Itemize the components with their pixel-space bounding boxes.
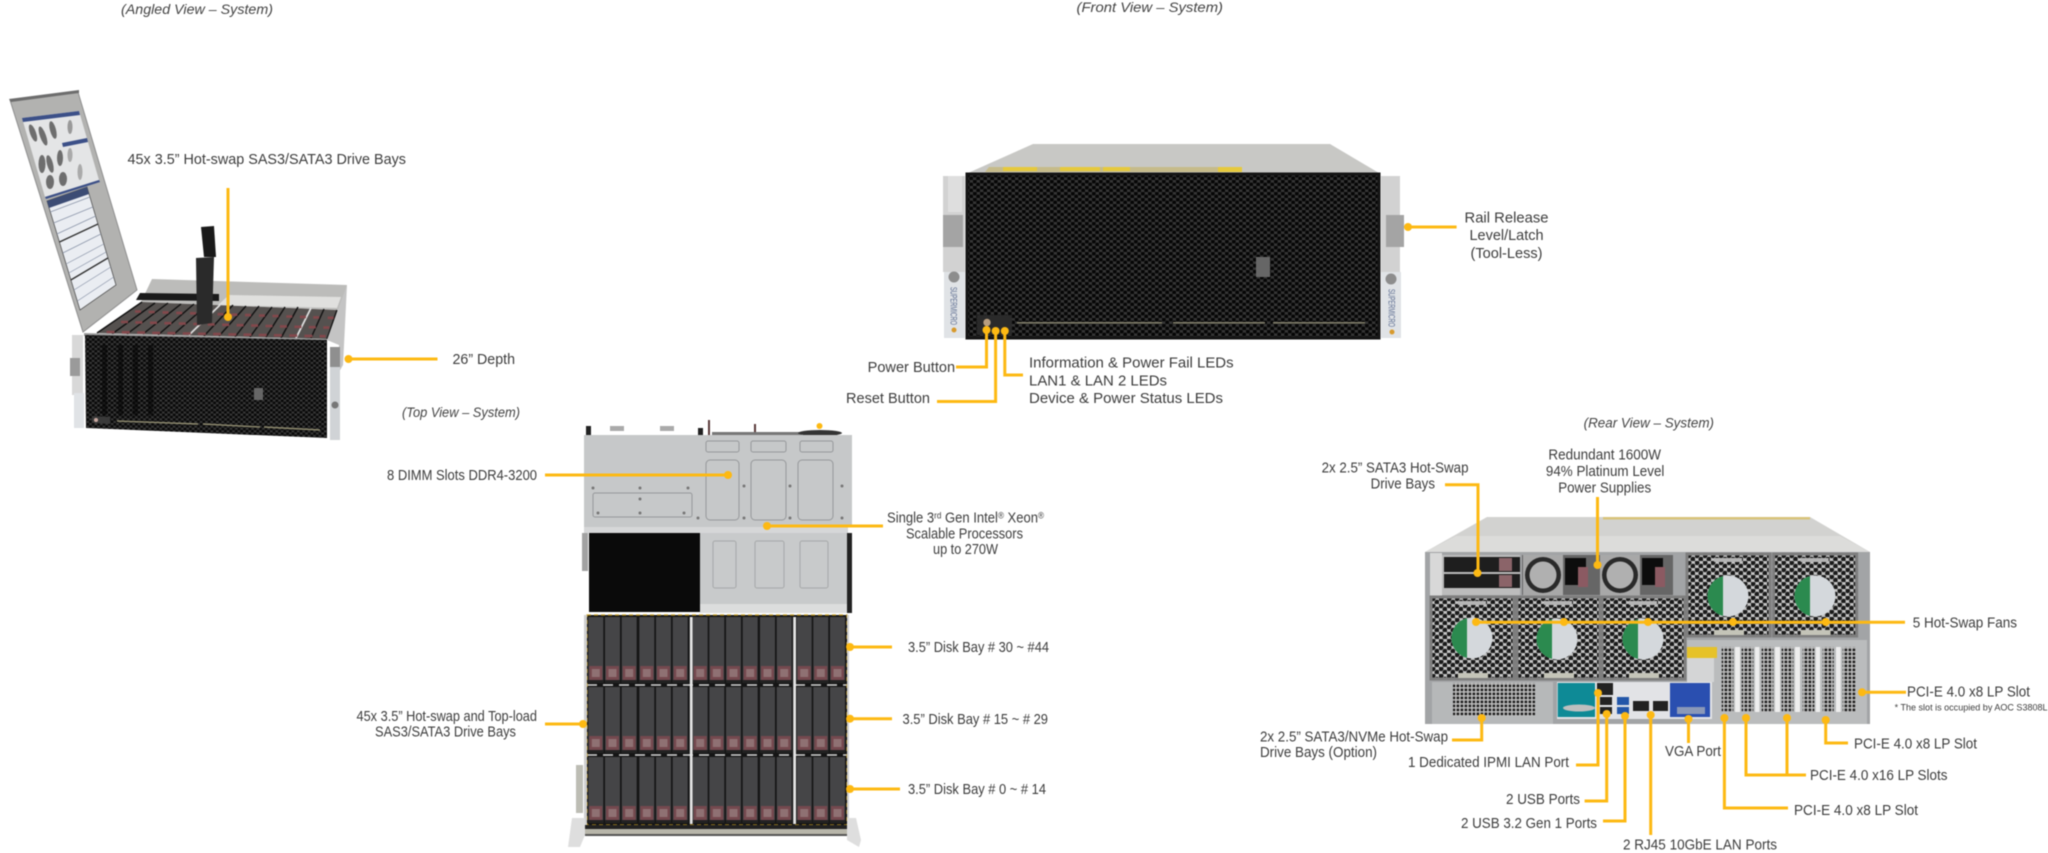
callout: processors: up to 270W [933, 542, 998, 558]
callout: processors: Single 3 [887, 510, 939, 526]
heading: top view caption: (Top View – System) [402, 405, 520, 420]
callout: LEDs: Information & Power Fail LEDs [1029, 356, 1234, 372]
callout: LEDs: Device & Power Status LEDs [1029, 391, 1223, 407]
callout: SATA3 drive bays: 2x 2.5” SATA3 Hot-Swap [1322, 461, 1468, 477]
callout: PCI-E x8 slot bottom [1720, 714, 1918, 819]
callout: VGA port [1665, 715, 1721, 760]
illustration: angled chassis with open lid [9, 90, 347, 440]
callout: RJ45 LAN ports [1623, 711, 1777, 853]
illustration: front chassis: SUPERMICRO [948, 287, 958, 325]
callout: top-load drive bays: 45x 3.5” Hot-swap and Top-load [356, 709, 537, 725]
callout: USB ports: 2 USB Ports [1506, 792, 1580, 808]
callout: DIMM slots [387, 468, 732, 484]
callout: drive bays: 45x 3.5” Hot-swap SAS3/SATA3 Drive Bays [128, 152, 406, 168]
callout: depth [344, 352, 515, 368]
callout: SATA3 drive bays [1322, 461, 1482, 577]
callout: disk bay 30-44: 3.5” Disk Bay # 30 ~ #44 [908, 640, 1049, 656]
callout: rail release: (Tool-Less) [1470, 246, 1542, 262]
callout: USB ports [1506, 710, 1611, 808]
heading: angled view caption: (Angled View – System) [121, 2, 273, 17]
callout: fans [1472, 616, 2017, 632]
callout: disk bay 15-29 [846, 712, 1048, 728]
panel: top view [356, 405, 1049, 847]
callout: processors: ® [998, 510, 1004, 520]
callout: USB 3.2 ports [1461, 712, 1629, 832]
callout: disk bay 0-14 [846, 782, 1046, 798]
callout: power supplies: Power Supplies [1558, 480, 1651, 496]
heading: rear view caption: (Rear View – System) [1584, 416, 1714, 430]
callout: processors [763, 510, 1044, 558]
callout: reset button: Reset Button [846, 391, 930, 407]
callout: SATA3/NVMe option bays: 2x 2.5” SATA3/NVMe Hot-Swap [1260, 730, 1448, 746]
callout: power supplies: 94% Platinum Level [1546, 464, 1664, 480]
callout: disk bay 15-29: 3.5” Disk Bay # 15 ~ # 29 [902, 712, 1048, 728]
panel: rear view [1260, 416, 2048, 853]
drive slot separators [97, 302, 337, 339]
callout: PCI-E x8 slot right [1822, 716, 1977, 753]
callout: PCI-E x16 slots [1742, 714, 1948, 784]
callout: LEDs [1001, 327, 1234, 407]
callout: power supplies [1546, 448, 1664, 569]
callout: DIMM slots: 8 DIMM Slots DDR4-3200 [387, 468, 537, 484]
callout: power button: Power Button [868, 360, 955, 376]
callout: IPMI LAN port [1408, 689, 1602, 771]
callout: rail release: Level/Latch [1470, 228, 1544, 244]
callout: USB 3.2 ports: 2 USB 3.2 Gen 1 Ports [1461, 816, 1597, 832]
callout: depth: 26” Depth [452, 352, 515, 368]
callout: IPMI LAN port: 1 Dedicated IPMI LAN Port [1408, 755, 1569, 771]
callout: processors: Xeon [1004, 510, 1038, 526]
callout: VGA port: VGA Port [1665, 744, 1721, 760]
callout: PCI-E x8 slot with footnote [1858, 685, 2048, 714]
callout: disk bay 30-44 [846, 640, 1049, 656]
callout: PCI-E x16 slots: PCI-E 4.0 x16 LP Slots [1810, 768, 1948, 784]
callout: processors: rd [934, 510, 941, 520]
callout: rail release [1404, 210, 1548, 262]
callout: SATA3/NVMe option bays [1260, 714, 1486, 761]
panel: front view [846, 0, 1548, 407]
callout: PCI-E x8 slot right: PCI-E 4.0 x8 LP Slot [1854, 737, 1977, 753]
callout: disk bay 0-14: 3.5” Disk Bay # 0 ~ # 14 [908, 782, 1046, 798]
callout: fans: 5 Hot-Swap Fans [1913, 616, 2017, 632]
callout: processors: ® [1038, 510, 1044, 520]
callout: power button [868, 326, 990, 376]
callout: SATA3/NVMe option bays: Drive Bays (Option) [1260, 745, 1377, 761]
callout: SATA3 drive bays: Drive Bays [1371, 477, 1435, 493]
callout: drive bays [128, 152, 406, 321]
callout: PCI-E x8 slot bottom: PCI-E 4.0 x8 LP Slot [1794, 803, 1918, 819]
illustration: top chassis [568, 420, 861, 847]
callout: processors: Scalable Processors [906, 526, 1023, 542]
callout: PCI-E x8 slot with footnote: PCI-E 4.0 x8 LP Slot [1907, 685, 2030, 701]
illustration: front chassis [943, 144, 1404, 338]
panel: angled view [9, 2, 515, 440]
callout: rail release: Rail Release [1464, 210, 1548, 226]
heading: front view caption: (Front View – System) [1076, 0, 1223, 15]
callout: power supplies: Redundant 1600W [1548, 448, 1661, 464]
callout: reset button [846, 327, 1000, 407]
callout: processors: Gen Intel [941, 510, 998, 526]
callout: top-load drive bays: SAS3/SATA3 Drive Bays [375, 725, 516, 741]
illustration: rear chassis [1425, 517, 1870, 724]
callout: LEDs: LAN1 & LAN 2 LEDs [1029, 374, 1167, 390]
illustration: front chassis: SUPERMICRO [1386, 289, 1396, 327]
callout: top-load drive bays [356, 709, 587, 741]
